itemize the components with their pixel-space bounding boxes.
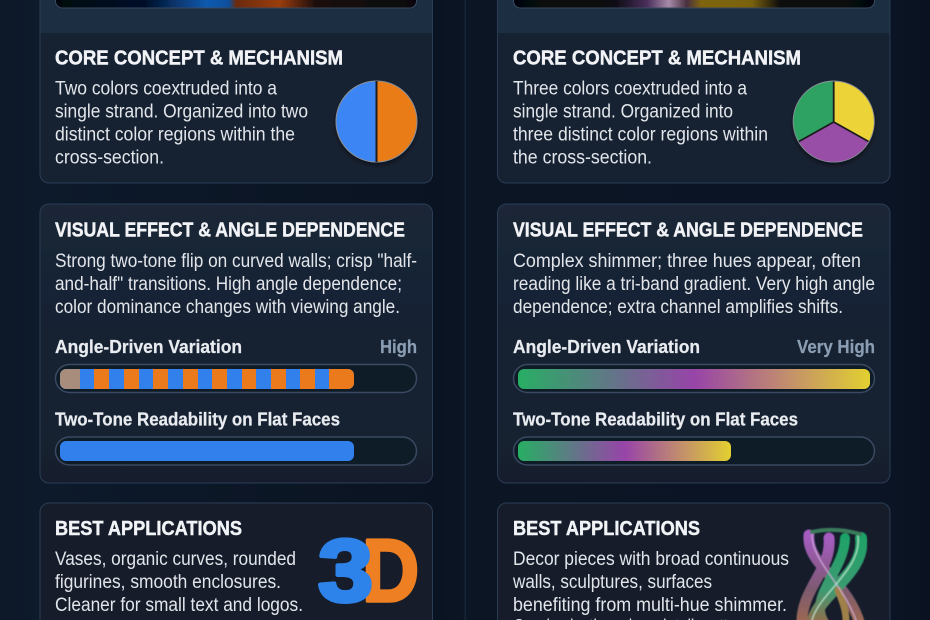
text: visual effect body: and-half" transitions. High angle dependence; [55, 274, 402, 295]
bar: two-tone readability [56, 437, 416, 465]
icon: twisted multi-color sculpture [802, 530, 861, 620]
text: core concept body: the cross-section. [513, 148, 652, 168]
text: best applications body: Vases, organic curves, rounded [55, 549, 296, 570]
heading: core concept: CORE CONCEPT & MECHANISM [513, 46, 801, 70]
text: best applications body: benefiting from multi-hue shimmer. [513, 595, 787, 616]
label: angle-driven variation: Angle-Driven Variation [55, 336, 242, 357]
icon: 3D logo [318, 521, 419, 620]
text: best applications body: Decor pieces with broad continuous [513, 549, 789, 570]
bar: two-tone readability [514, 437, 874, 465]
icon: two-color cross-section [336, 80, 418, 162]
text: visual effect body [55, 251, 417, 318]
text: visual effect body: reading like a tri-band gradient. Very high angle [513, 274, 875, 295]
heading: visual effect: VISUAL EFFECT & ANGLE DEPENDENCE [55, 218, 405, 242]
panel: visual effect (dual) [40, 204, 432, 483]
text: core concept body: single strand. Organized into [513, 102, 733, 122]
text: best applications body: Cleaner for small text and logos. [55, 595, 303, 616]
text: core concept body: distinct color regions within the [55, 124, 295, 146]
text: visual effect body [513, 251, 875, 318]
text: best applications body [55, 549, 303, 616]
text: core concept body: three distinct color regions within [513, 124, 768, 146]
text: core concept body: Three colors coextruded into a [513, 78, 747, 100]
heading: core concept: CORE CONCEPT & MECHANISM [55, 46, 343, 70]
image strip: dual color hero [56, 0, 416, 8]
text: core concept body [55, 78, 308, 168]
text: core concept body: Two colors coextruded into a [55, 78, 277, 100]
value: high: High [380, 336, 417, 357]
text: best applications body [512, 549, 789, 620]
left column: dual color [40, 0, 432, 620]
heading: best applications: BEST APPLICATIONS [55, 517, 242, 540]
icon: 3D logo: 3 [318, 521, 373, 620]
text: core concept body [513, 78, 768, 168]
text: visual effect body: dependence; extra channel amplifies shifts. [513, 297, 843, 318]
panel: core concept (tri) [498, 0, 890, 183]
label: angle-driven variation: Angle-Driven Variation [513, 336, 700, 357]
text: visual effect body: Complex shimmer; three hues appear, often [513, 251, 861, 272]
panel: visual effect (tri) [498, 204, 890, 483]
text: best applications body: walls, sculptures, surfaces [512, 572, 712, 593]
image strip: tri color hero [514, 0, 874, 8]
text: visual effect body: color dominance changes with viewing angle. [55, 297, 400, 318]
right column: tri color [498, 0, 890, 620]
icon: three-color cross-section [793, 80, 875, 162]
label: two-tone readability: Two-Tone Readability on Flat Faces [55, 408, 340, 430]
value: very high: Very High [797, 336, 875, 357]
panel: best applications (dual) [40, 503, 432, 620]
label: two-tone readability: Two-Tone Readability on Flat Faces [513, 408, 798, 430]
text: best applications body: figurines, smooth enclosures. [55, 572, 281, 593]
text: core concept body: single strand. Organized into two [55, 102, 308, 122]
bar: angle-driven variation [514, 364, 874, 392]
text: core concept body: cross-section. [55, 148, 164, 168]
heading: best applications: BEST APPLICATIONS [513, 517, 700, 540]
panel: best applications (tri) [498, 503, 890, 620]
bar: angle-driven variation [56, 364, 416, 392]
panel: core concept (dual) [40, 0, 432, 183]
icon: 3D logo: D [362, 521, 419, 620]
text: visual effect body: Strong two-tone flip on curved walls; crisp "half- [55, 251, 417, 272]
heading: visual effect: VISUAL EFFECT & ANGLE DEPENDENCE [513, 218, 863, 242]
